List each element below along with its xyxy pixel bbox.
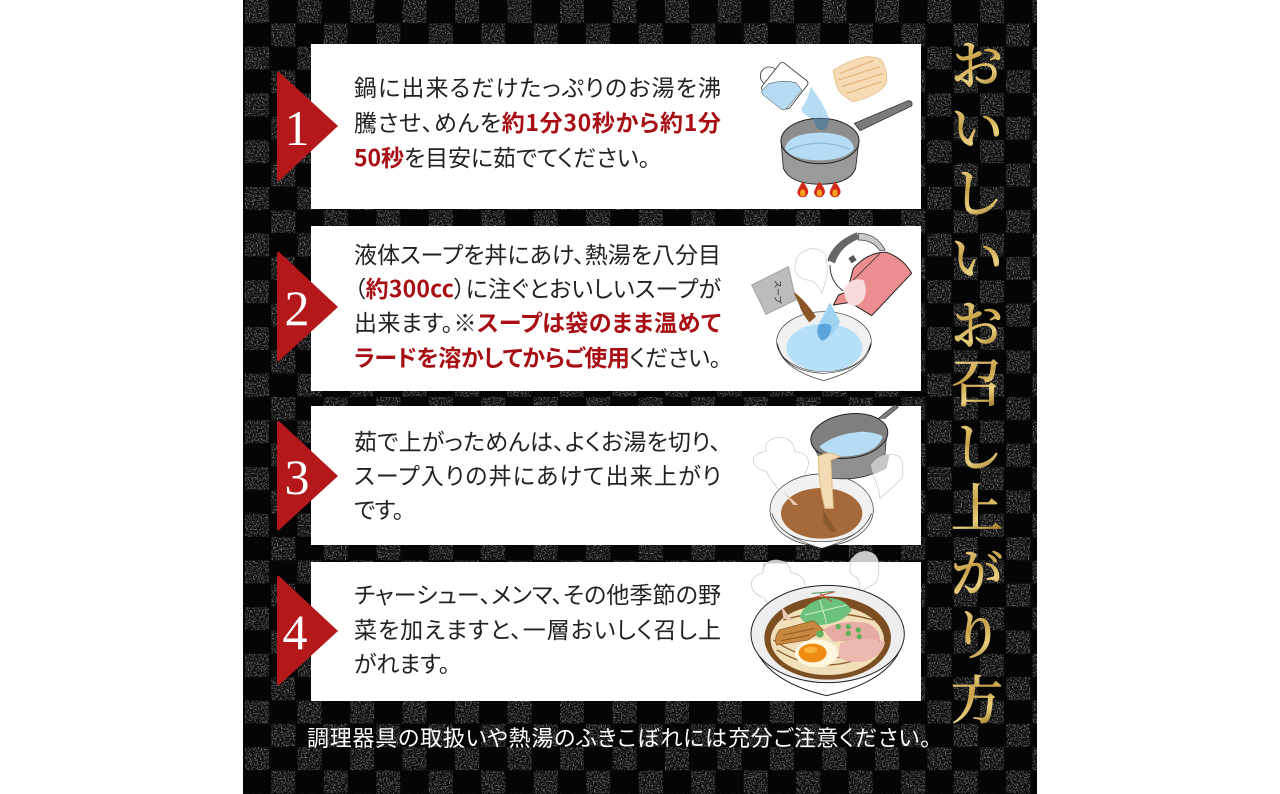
- step 4 text: がれます。: [354, 645, 450, 679]
- footer note: 調理器具の取扱いや熱湯のふきこぼれには充分ご注意ください。: [307, 721, 931, 753]
- step 1 text: 騰させ、めんを約1分30秒から約1分: [354, 104, 721, 138]
- title: vertical gold heading: お: [951, 299, 1003, 356]
- icon: pouring noodles into soup bowl: [753, 405, 903, 548]
- title: vertical gold heading: い: [951, 232, 1003, 289]
- step 3 badge: 3: [284, 449, 310, 505]
- panel: checkered black background: [243, 0, 1037, 794]
- step 4 text: チャーシュー、メンマ、その他季節の野: [354, 576, 721, 610]
- step 4 text: [354, 576, 721, 679]
- step 2 badge: 2: [284, 280, 310, 336]
- title: vertical gold heading: [951, 39, 1003, 731]
- step 3 text: スープ入りの丼にあけて出来上がり: [354, 457, 721, 491]
- step 1 text: [354, 69, 721, 173]
- panel: step 4: [277, 551, 921, 701]
- step 1 text: 50秒を目安に茹でてください。: [354, 139, 650, 173]
- icon: soup packet, kettle and bowl: スープ: [772, 280, 783, 303]
- step 1 text: 鍋に出来るだけたっぷりのお湯を沸: [354, 69, 721, 103]
- icon: soup packet, kettle and bowl: [752, 232, 912, 381]
- step 2 text: 液体スープを丼にあけ、熱湯を八分目: [354, 236, 721, 270]
- step 4 badge: [277, 576, 338, 685]
- step 1 badge: 1: [284, 100, 310, 156]
- step 2 text: [354, 236, 721, 373]
- panel: step 2: [277, 226, 921, 391]
- step 3 badge: [277, 421, 338, 530]
- title: vertical gold heading: し: [951, 167, 1003, 224]
- title: vertical gold heading: お: [951, 39, 1003, 96]
- title: vertical gold heading: 上: [951, 482, 1003, 539]
- step 2 text: （約300cc）に注ぐとおいしいスープが: [354, 270, 721, 304]
- title: vertical gold heading: り: [951, 609, 1003, 666]
- step 1 badge: [277, 72, 338, 181]
- title: vertical gold heading: が: [951, 547, 1003, 604]
- panel: step 3: [277, 405, 921, 548]
- title: vertical gold heading: し: [951, 421, 1003, 478]
- title: vertical gold heading: い: [951, 102, 1003, 159]
- step 4 badge: 4: [282, 604, 308, 660]
- panel: step 1: [277, 44, 921, 209]
- icon: finished ramen bowl: [751, 551, 904, 696]
- step 4 text: 菜を加えますと、一層おいしく召し上: [354, 611, 721, 645]
- step 2 text: ラードを溶かしてからご使用ください。: [354, 339, 721, 373]
- title: vertical gold heading: 方: [951, 674, 1003, 731]
- step 3 text: [354, 423, 721, 525]
- step 3 text: 茹で上がっためんは、よくお湯を切り、: [354, 423, 721, 457]
- title: vertical gold heading: 召: [951, 357, 1003, 414]
- step 3 text: です。: [354, 491, 404, 525]
- icon: pot on flame with water and noodles: [760, 57, 912, 197]
- step 2 badge: [277, 252, 338, 361]
- step 2 text: 出来ます。※スープは袋のまま温めて: [354, 304, 721, 338]
